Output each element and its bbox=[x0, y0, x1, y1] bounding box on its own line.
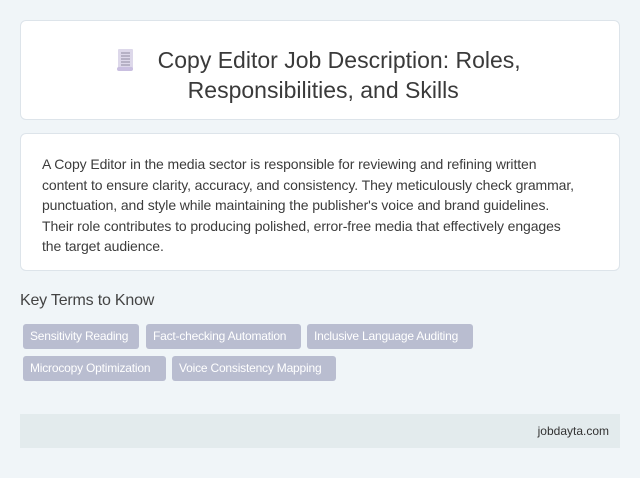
tags bbox=[23, 324, 473, 381]
description text bbox=[20, 133, 620, 271]
description text: the target audience. bbox=[42, 238, 164, 254]
footer: jobdayta.com bbox=[538, 424, 609, 438]
description text: Their role contributes to producing polished, error-free media that effectively engages bbox=[42, 218, 561, 234]
icon: document bbox=[117, 49, 133, 71]
heading: Copy Editor Job Description: Roles, bbox=[158, 47, 521, 73]
heading bbox=[158, 47, 521, 103]
text: Voice Consistency Mapping bbox=[179, 361, 321, 375]
description text: A Copy Editor in the media sector is responsible for reviewing and refining written bbox=[42, 156, 536, 172]
text: Inclusive Language Auditing bbox=[314, 329, 458, 343]
text: Fact-checking Automation bbox=[153, 329, 286, 343]
footer bbox=[20, 414, 620, 448]
text: Sensitivity Reading bbox=[30, 329, 128, 343]
heading: Responsibilities, and Skills bbox=[188, 77, 459, 103]
title card bbox=[20, 20, 620, 120]
text: Microcopy Optimization bbox=[30, 361, 150, 375]
description text: content to ensure clarity, accuracy, and consistency. They meticulously check grammar, bbox=[42, 176, 574, 192]
key terms heading: Key Terms to Know bbox=[20, 292, 154, 309]
description text: punctuation, and style while maintaining the publisher's voice and brand guidelines. bbox=[42, 197, 549, 213]
